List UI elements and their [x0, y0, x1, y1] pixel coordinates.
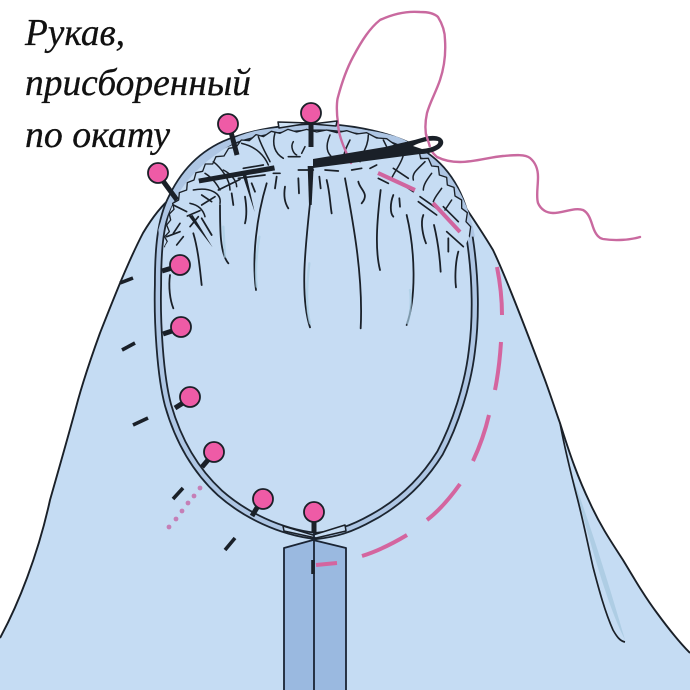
- pins: [148, 103, 324, 533]
- title: присборенный: [25, 62, 251, 104]
- cross stitches: [167, 157, 463, 247]
- needle point on the left: [198, 165, 275, 183]
- needle with eye: [313, 134, 443, 168]
- gathered cap detail: [158, 127, 475, 328]
- sleeve outline: [0, 157, 690, 653]
- gathers band shade: [158, 127, 475, 250]
- pin tip crossing: [189, 215, 213, 247]
- sleeve fold right: [560, 423, 625, 642]
- gather shadows: [223, 227, 411, 323]
- pink thread: [337, 12, 640, 240]
- black notch marks: [120, 278, 313, 574]
- fold lines in the ruffle: [190, 133, 452, 217]
- ruffled edge: [165, 129, 471, 247]
- title: [24, 12, 251, 156]
- pink basting stitches on top: [378, 173, 460, 232]
- pink dashed stitching: [316, 267, 502, 565]
- pink dotted line: [167, 486, 202, 529]
- underarm placket: [284, 528, 346, 690]
- seam allowance flaps: [278, 121, 346, 538]
- armhole ring: [158, 127, 475, 536]
- sleeve body: [0, 157, 690, 690]
- title: Рукав,: [24, 12, 125, 54]
- title: по окату: [25, 114, 170, 156]
- long gathers: [169, 177, 458, 328]
